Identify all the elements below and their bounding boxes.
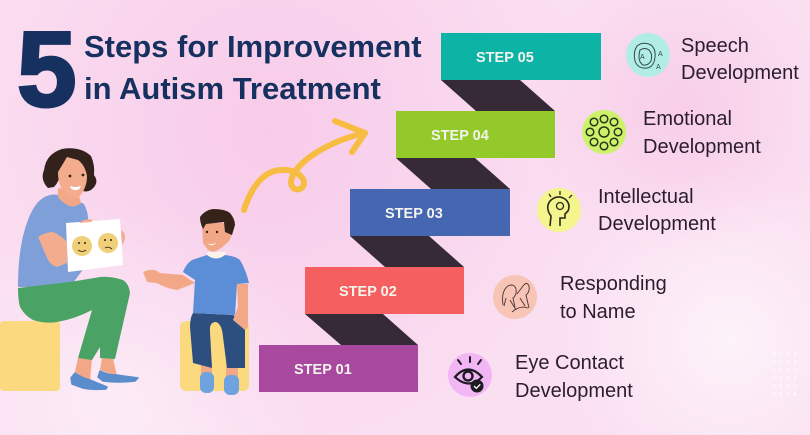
boy's arm left bbox=[143, 270, 195, 290]
step 04 bbox=[396, 111, 555, 158]
icon: intellectual development bbox=[537, 188, 581, 232]
label: eye contact: Development bbox=[515, 380, 633, 402]
boy's hair bbox=[200, 209, 235, 235]
icon: speech development: A bbox=[656, 64, 661, 71]
woman's torso bbox=[18, 194, 90, 287]
label: emotional: Development bbox=[643, 136, 761, 158]
step 01: STEP 01 bbox=[294, 362, 352, 378]
boy's trousers bbox=[190, 313, 245, 368]
boy's arm right bbox=[233, 284, 248, 330]
label: speech bbox=[681, 35, 799, 84]
step 04: STEP 04 bbox=[431, 128, 489, 144]
woman's trousers bbox=[18, 277, 130, 360]
label: responding bbox=[560, 273, 667, 323]
illustration: boy bbox=[143, 209, 249, 395]
icon: speech development: A bbox=[658, 51, 663, 58]
step 02 bbox=[305, 267, 464, 314]
emotion card bbox=[66, 219, 123, 272]
step 03 bbox=[350, 189, 510, 236]
label: responding: to Name bbox=[560, 301, 636, 323]
step 05: STEP 05 bbox=[476, 50, 534, 66]
title: 5 bbox=[17, 9, 77, 129]
title bbox=[17, 9, 422, 129]
boy's shins bbox=[201, 362, 238, 378]
label: emotional bbox=[643, 108, 761, 158]
icon: speech development: A bbox=[640, 54, 645, 61]
illustration: woman with emotion card bbox=[0, 148, 138, 391]
label: intellectual: Development bbox=[598, 213, 716, 235]
boy's shirt bbox=[183, 255, 249, 315]
label: responding: Responding bbox=[560, 273, 667, 295]
woman's shoes bbox=[71, 371, 138, 389]
label: eye contact: Eye Contact bbox=[515, 352, 624, 374]
icon: responding to name bbox=[493, 275, 537, 319]
icon: eye contact bbox=[448, 353, 492, 397]
woman's hair bbox=[43, 148, 96, 192]
label: eye contact bbox=[515, 352, 633, 402]
step 03: STEP 03 bbox=[385, 206, 443, 222]
label: speech: Development bbox=[681, 62, 799, 84]
step 05 bbox=[441, 33, 601, 80]
woman's neck bbox=[58, 188, 81, 206]
title: Steps for Improvement bbox=[84, 29, 422, 64]
woman's arm bbox=[38, 232, 67, 267]
woman's seat bbox=[0, 321, 60, 391]
boy's seat bbox=[180, 321, 249, 391]
arrow bbox=[244, 121, 365, 210]
label: speech: Speech bbox=[681, 35, 749, 57]
boy's collar bbox=[207, 252, 226, 258]
woman's face bbox=[58, 157, 87, 198]
label: intellectual: Intellectual bbox=[598, 186, 694, 208]
boy's shoes bbox=[200, 372, 214, 393]
icon: emotional development bbox=[582, 110, 626, 154]
staircase connectors bbox=[305, 80, 555, 345]
title: in Autism Treatment bbox=[84, 71, 381, 106]
woman's shins bbox=[75, 358, 117, 382]
decorative dots bbox=[773, 353, 796, 395]
step 02: STEP 02 bbox=[339, 284, 397, 300]
woman's fingers bbox=[79, 219, 125, 244]
boy's head bbox=[202, 223, 232, 252]
icon: speech development bbox=[626, 33, 670, 77]
step 01 bbox=[259, 345, 418, 392]
label: emotional: Emotional bbox=[643, 108, 732, 130]
label: intellectual bbox=[598, 186, 716, 235]
